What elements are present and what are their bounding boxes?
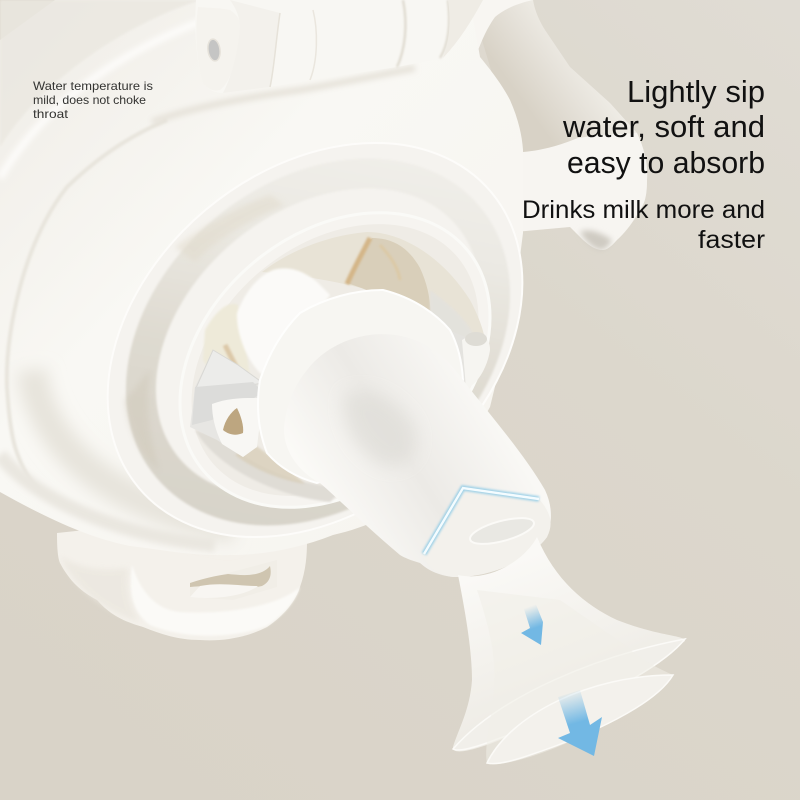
nozzle tube xyxy=(284,334,551,577)
body shading arcs xyxy=(0,0,415,545)
highlight corner line xyxy=(424,488,539,554)
large blue arrow xyxy=(558,690,602,756)
lower loop handle xyxy=(57,520,307,640)
inner lens window xyxy=(122,152,548,568)
small blue arrow xyxy=(521,602,543,645)
flare back rim xyxy=(453,537,685,751)
main body disc xyxy=(0,0,523,555)
small caption: mild, does not choke xyxy=(33,93,146,107)
subheading xyxy=(522,196,765,254)
headline: water, soft and xyxy=(562,109,765,144)
headline: Lightly sip xyxy=(627,74,765,109)
flare front rim xyxy=(477,590,673,764)
side nub on collar xyxy=(462,332,490,388)
right side arm xyxy=(460,0,647,250)
small caption xyxy=(33,79,153,121)
top hinge xyxy=(195,0,483,93)
crystal valve xyxy=(190,350,263,457)
subheading: faster xyxy=(698,226,765,254)
small caption: Water temperature is xyxy=(33,79,153,93)
transparent outer lens ring xyxy=(30,62,600,618)
nozzle collar xyxy=(258,290,463,483)
tube soft shadow xyxy=(344,391,416,466)
subheading: Drinks milk more and xyxy=(522,196,765,224)
headline: easy to absorb xyxy=(567,145,765,180)
nozzle mouth xyxy=(423,487,551,577)
inner nipple stub xyxy=(237,268,330,375)
small caption: throat xyxy=(33,107,69,121)
headline xyxy=(562,74,765,180)
